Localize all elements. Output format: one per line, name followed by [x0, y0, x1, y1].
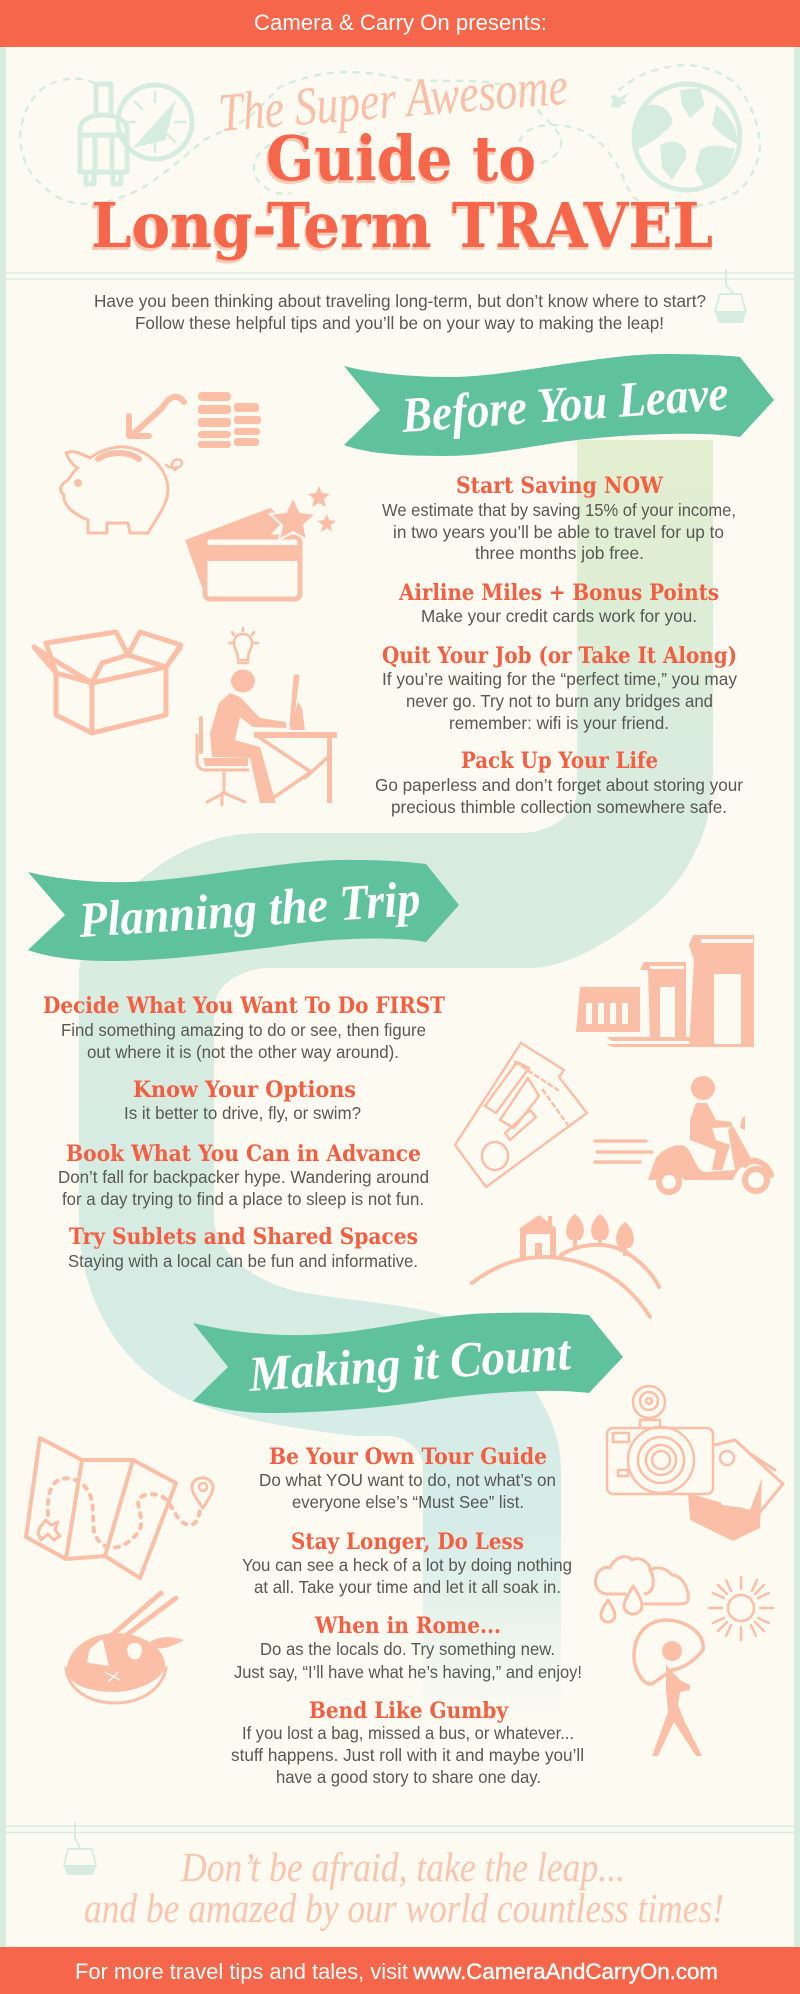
tip: decide: Find something amazing to do or see, then figure	[61, 1020, 426, 1040]
tip: know options: Know Your Options	[133, 1077, 356, 1103]
closing message	[84, 1844, 724, 1931]
tip: quit your job: If you’re waiting for the “perfect time,” you may	[382, 669, 737, 689]
cable lines bottom	[6, 1826, 794, 1832]
icon: gondola bottom	[64, 1823, 96, 1875]
icon: compass	[118, 85, 192, 159]
icon: globe	[633, 84, 740, 190]
title line two shadow: Guide to	[264, 125, 536, 198]
title line three: Long-Term TRAVEL	[91, 189, 713, 262]
tip: tour guide: Be Your Own Tour Guide	[269, 1444, 547, 1470]
intro text: Have you been thinking about traveling long-term, but don’t know where to start?	[94, 291, 706, 311]
banner: making it count	[193, 1313, 623, 1413]
tip: quit your job	[382, 643, 737, 733]
tip: start saving: in two years you’ll be able to travel for up to	[393, 522, 724, 542]
icon: sun	[709, 1577, 773, 1640]
tip: start saving: Start Saving NOW	[456, 473, 663, 499]
tip: tour guide	[259, 1444, 556, 1512]
icon: house on hills	[472, 1214, 659, 1317]
tip: pack up: Go paperless and don’t forget about storing your	[375, 775, 743, 795]
tip: quit your job: never go. Try not to burn any bridges and	[406, 691, 713, 711]
icon: person with umbrella	[634, 1620, 703, 1756]
tip: decide: Decide What You Want To Do FIRST	[43, 993, 446, 1019]
winding road background	[79, 440, 713, 1720]
icon: temples	[576, 935, 754, 1047]
tip: start saving: We estimate that by saving 15% of your income,	[382, 500, 736, 520]
icon: coins	[198, 392, 261, 448]
section text: planning the trip	[43, 993, 446, 1271]
title line two: Guide to	[266, 122, 536, 195]
title line one: The Super Awesome	[216, 56, 570, 143]
tip: when in rome: Just say, “I’ll have what he’s having,” and enjoy!	[234, 1662, 582, 1682]
tip: decide	[43, 993, 446, 1062]
tip: airline miles: Airline Miles + Bonus Points	[398, 580, 719, 606]
icon: gondola top	[715, 270, 746, 323]
tip: decide: out where it is (not the other way around).	[87, 1042, 399, 1062]
icon: camera	[607, 1386, 713, 1494]
icon: tickets	[455, 1043, 587, 1187]
icon: cardboard box	[34, 632, 181, 733]
title line three shadow: Long-Term TRAVEL	[89, 192, 713, 265]
title	[89, 56, 713, 265]
intro text	[94, 291, 706, 333]
tip: when in rome	[234, 1613, 582, 1682]
tip: pack up: Pack Up Your Life	[461, 748, 658, 774]
tip: tour guide: everyone else’s “Must See” list.	[292, 1492, 524, 1512]
icon: airplane	[610, 92, 633, 109]
tip: quit your job: Quit Your Job (or Take It Along)	[382, 643, 737, 669]
closing message: Don’t be afraid, take the leap...	[180, 1844, 625, 1890]
icon: credit card with stars	[185, 486, 336, 599]
dashed flight paths	[20, 65, 760, 208]
tip: start saving: three months job free.	[475, 543, 644, 563]
tip: when in rome: Do as the locals do. Try something new.	[260, 1639, 555, 1659]
tip: know options	[124, 1077, 361, 1123]
tip: stay longer: at all. Take your time and let it all soak in.	[254, 1577, 561, 1597]
tip: when in rome: When in Rome...	[314, 1613, 501, 1639]
section text: before you leave	[375, 473, 743, 817]
icon: piggy bank	[61, 447, 182, 533]
tip: tour guide: Do what YOU want to do, not what’s on	[259, 1470, 556, 1490]
banner: planning the trip	[28, 860, 459, 961]
icon: arrow to piggy bank	[129, 397, 184, 436]
tip: stay longer: Stay Longer, Do Less	[291, 1529, 524, 1555]
tip: bend like gumby: Bend Like Gumby	[309, 1698, 509, 1724]
tip: airline miles: Make your credit cards work for you.	[421, 606, 697, 626]
banner: before you leave: Before You Leave	[399, 364, 730, 443]
tip: bend like gumby: have a good story to share one day.	[276, 1767, 541, 1787]
icon: light bulb	[229, 628, 258, 663]
icon: suitcase	[80, 84, 127, 184]
icon: rain clouds	[596, 1557, 688, 1622]
banner: before you leave	[344, 354, 774, 456]
icon: person at desk	[197, 670, 337, 805]
tip: sublets: Staying with a local can be fun and informative.	[68, 1251, 418, 1271]
top bar: Camera & Carry On presents:	[254, 10, 547, 35]
icon: map	[26, 1438, 213, 1578]
bottom bar: For more travel tips and tales, visit	[75, 1959, 408, 1984]
cable lines	[6, 273, 794, 279]
bottom bar: www.CameraAndCarryOn.com	[412, 1959, 718, 1984]
tip: start saving	[382, 473, 736, 563]
section text: making it count	[231, 1444, 584, 1787]
tip: know options: Is it better to drive, fly, or swim?	[124, 1103, 361, 1123]
tip: airline miles	[398, 580, 719, 626]
tip: book: Don’t fall for backpacker hype. Wandering around	[58, 1167, 429, 1187]
tip: book: for a day trying to find a place to sleep is not fun.	[62, 1189, 424, 1209]
tip: bend like gumby: stuff happens. Just roll with it and maybe you’ll	[231, 1745, 584, 1765]
icon: noodle bowl	[66, 1593, 184, 1703]
tip: stay longer	[242, 1529, 572, 1597]
tip: pack up	[375, 748, 743, 817]
top bar	[0, 0, 800, 47]
icon: scooter rider	[595, 1076, 771, 1192]
tip: bend like gumby: If you lost a bag, missed a bus, or whatever...	[242, 1723, 574, 1743]
icon: photographs	[688, 1440, 783, 1541]
tip: stay longer: You can see a heck of a lot by doing nothing	[242, 1555, 572, 1575]
bottom bar	[0, 1947, 800, 1994]
banner: planning the trip: Planning the Trip	[76, 870, 422, 948]
intro text: Follow these helpful tips and you’ll be on your way to making the leap!	[135, 313, 664, 333]
tip: bend like gumby	[231, 1698, 584, 1787]
tip: quit your job: remember: wifi is your friend.	[449, 713, 669, 733]
tip: sublets	[68, 1224, 418, 1271]
banner: making it count: Making it Count	[246, 1324, 574, 1402]
tip: pack up: precious thimble collection somewhere safe.	[391, 797, 727, 817]
tip: book: Book What You Can in Advance	[66, 1141, 421, 1167]
tip: sublets: Try Sublets and Shared Spaces	[69, 1224, 418, 1250]
tip: book	[58, 1141, 429, 1209]
